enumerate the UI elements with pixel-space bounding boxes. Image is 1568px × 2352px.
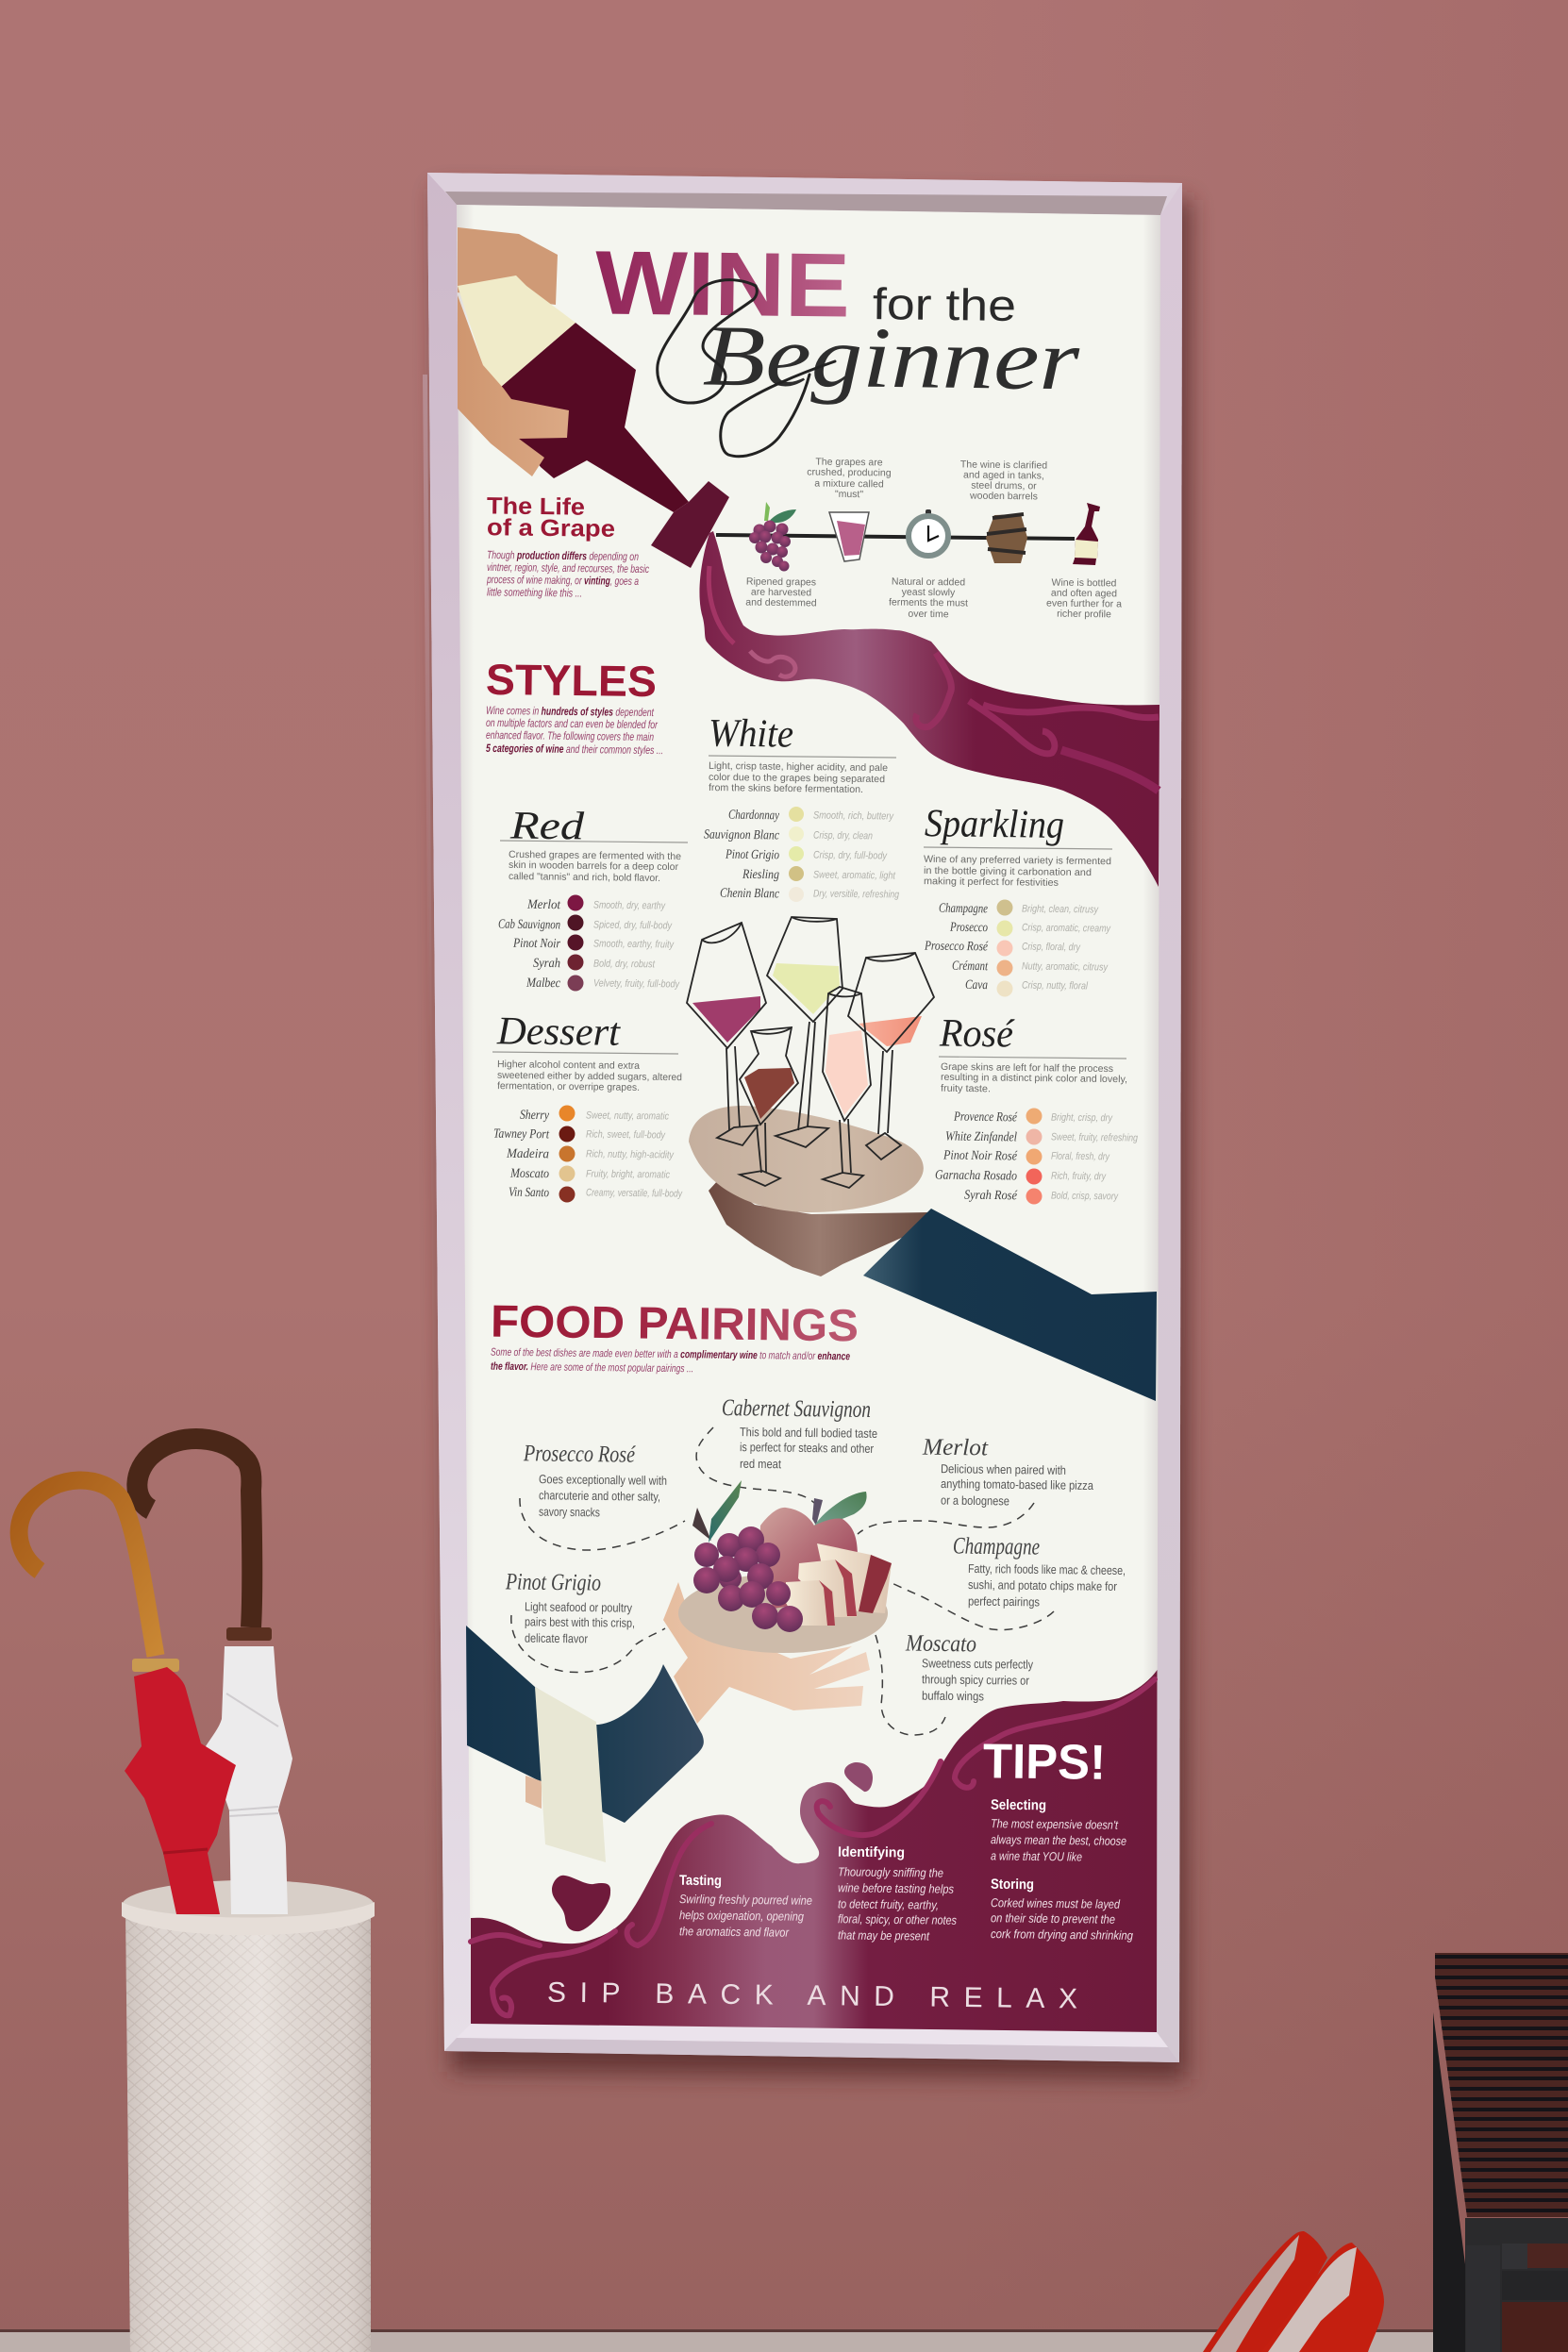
tray <box>689 1106 924 1212</box>
panel: white wine: Sweet, aromatic, light <box>813 869 896 882</box>
tip: tasting <box>679 1873 812 1940</box>
step: bottle: even further for a <box>1046 598 1122 609</box>
panel: dessert wine: sweetened either by added sugars, altered <box>497 1070 682 1083</box>
panel: rose wine: Floral, fresh, dry <box>1051 1151 1110 1162</box>
dark hand <box>709 1179 929 1276</box>
panel: red wine: Smooth, dry, earthy <box>593 900 666 911</box>
intro heading: of a Grape <box>487 514 615 542</box>
icon: grapes <box>749 502 796 572</box>
panel: rose wine: Garnacha Rosado <box>935 1168 1017 1184</box>
arm sleeve <box>458 227 558 305</box>
wrist <box>525 1776 542 1809</box>
tip: tasting: helps oxigenation, opening <box>679 1908 805 1924</box>
panel: sparkling wine: Champagne <box>939 902 988 916</box>
step: ferment <box>889 576 968 620</box>
icon: glass of must <box>829 512 869 561</box>
bottle neck foil <box>651 481 729 568</box>
pairing: cabernet sauvignon: is perfect for steaks and other <box>740 1440 875 1456</box>
panel: dessert wine: fermentation, or overripe grapes. <box>497 1080 640 1093</box>
step: bottle <box>1046 577 1122 620</box>
umbrella stand <box>122 1902 375 2352</box>
panel: red wine <box>498 805 688 991</box>
panel: red wine: called "tannis" and rich, bold flavor. <box>509 871 660 884</box>
panel: red wine: Velvety, fruity, full-body <box>593 977 680 991</box>
intro text: Though production differs depending on <box>487 548 639 563</box>
step: ferment: yeast slowly <box>902 587 956 598</box>
tip: storing: Storing <box>991 1877 1034 1893</box>
cuff <box>458 275 575 387</box>
pairing: cabernet sauvignon: This bold and full bodied taste <box>740 1425 877 1441</box>
step: must: crushed, producing <box>807 466 892 479</box>
step: bottle: and often aged <box>1051 588 1117 599</box>
pairing: moscato <box>905 1631 1033 1703</box>
step: bottle: richer profile <box>1057 609 1111 620</box>
panel: dessert wine: Sherry <box>520 1109 550 1123</box>
styles heading <box>486 655 663 757</box>
panel: red wine: Syrah <box>533 957 560 971</box>
glass: sparkling flute <box>823 987 871 1188</box>
pairing: moscato: Sweetness cuts perfectly <box>922 1656 1033 1672</box>
step: harvest: are harvested <box>751 587 811 598</box>
panel: dessert wine: Tawney Port <box>493 1127 550 1142</box>
tip: identifying: floral, spicy, or other notes <box>838 1911 957 1927</box>
panel: red wine: Malbec <box>525 976 561 991</box>
title word: WINE: WINE <box>594 232 851 337</box>
panel: sparkling wine: in the bottle giving it carbonation and <box>924 865 1092 878</box>
step: harvest: and destemmed <box>745 597 817 609</box>
panel: sparkling wine <box>924 802 1112 996</box>
step: clarified: wooden barrels <box>969 491 1038 502</box>
title word: Beginner: Beginner <box>702 308 1081 408</box>
panel: sparkling wine: making it perfect for festivities <box>924 876 1059 889</box>
red shoes <box>1203 2231 1384 2352</box>
panel: red wine: Bold, dry, robust <box>593 959 656 970</box>
pairing: moscato: Moscato <box>905 1631 976 1657</box>
pairing: cabernet sauvignon: red meat <box>740 1457 781 1471</box>
panel: sparkling wine: Cava <box>965 978 988 993</box>
panel: dessert wine: Creamy, versatile, full-body <box>586 1187 683 1200</box>
the life of a grape intro <box>486 492 649 600</box>
panel: sparkling wine: Prosecco <box>949 921 988 935</box>
hand <box>458 295 569 476</box>
tip: tasting: Swirling freshly pourred wine <box>679 1892 812 1908</box>
panel: white wine: Chenin Blanc <box>720 887 780 901</box>
panel: dessert wine: Madeira <box>506 1147 549 1161</box>
styles intro text: Wine comes in hundreds of styles dependent <box>486 704 655 719</box>
panel: white wine: Riesling <box>742 868 779 882</box>
icon: wine bottle <box>1073 503 1100 565</box>
tip: tasting: Tasting <box>679 1873 722 1889</box>
poster frame <box>427 173 1182 2062</box>
panel: rose wine: Rich, fruity, dry <box>1051 1171 1107 1182</box>
panel: white wine: Light, crisp taste, higher acidity, and pale <box>709 760 888 774</box>
glass: salmon rose <box>848 953 934 1159</box>
title flourish <box>658 280 835 457</box>
pairing: champagne: perfect pairings <box>968 1594 1041 1609</box>
panel: dessert wine: Rich, sweet, full-body <box>586 1128 666 1142</box>
hand <box>663 1582 870 1724</box>
panel: white wine: Smooth, rich, buttery <box>813 809 894 823</box>
intro heading <box>487 492 615 542</box>
intro text: process of wine making, or vinting, goes a <box>486 573 639 588</box>
panel: rose wine: Syrah Rosé <box>964 1189 1018 1203</box>
panel: dessert wine: Higher alcohol content and extra <box>497 1059 640 1072</box>
panel: red wine: Spiced, dry, full-body <box>593 919 673 932</box>
tips heading: TIPS! <box>983 1734 1106 1791</box>
tip: selecting: always mean the best, choose <box>991 1832 1126 1848</box>
panel: dessert wine: Dessert <box>496 1009 622 1055</box>
panel: white wine: color due to the grapes being separated <box>709 772 885 785</box>
intro text <box>486 548 649 600</box>
dashed connector lines <box>511 1427 1054 1735</box>
pairing: moscato: buffalo wings <box>922 1689 985 1703</box>
food pairings intro: the flavor. Here are some of the most popular pairings ... <box>491 1361 693 1375</box>
wine stream <box>699 531 1159 887</box>
step: clarified: and aged in tanks, <box>963 469 1044 482</box>
panel: rose wine <box>935 1012 1139 1204</box>
tip: identifying: Thourougly sniffing the <box>838 1864 943 1880</box>
step: must: "must" <box>835 489 863 500</box>
wine bottle <box>501 323 689 512</box>
pairing: pinot grigio: delicate flavor <box>525 1631 589 1645</box>
white umbrella <box>137 1439 292 1914</box>
panel: white wine: Crisp, dry, clean <box>813 830 873 842</box>
tip: storing: on their side to prevent the <box>991 1910 1115 1927</box>
navy sleeve <box>863 1209 1157 1401</box>
panel: sparkling wine: Prosecco Rosé <box>924 940 989 954</box>
tip: storing <box>991 1877 1134 1943</box>
pairing: pinot grigio: Pinot Grigio <box>505 1569 601 1596</box>
step: ferment: ferments the must <box>889 596 968 609</box>
panel: rose wine: Sweet, fruity, refreshing <box>1051 1131 1139 1144</box>
title <box>594 232 1081 457</box>
apple <box>760 1492 867 1609</box>
pairing: moscato: through spicy curries or <box>922 1672 1030 1688</box>
pairing: merlot: Merlot <box>922 1435 989 1460</box>
panel: dessert wine: Vin Santo <box>509 1186 549 1200</box>
panel: dessert wine: Sweet, nutty, aromatic <box>586 1109 669 1123</box>
pairing: cabernet sauvignon: Cabernet Sauvignon <box>722 1395 871 1423</box>
timeline <box>716 457 1122 620</box>
tip: selecting: The most expensive doesn't <box>991 1816 1119 1832</box>
icon: barrel <box>986 514 1027 563</box>
tip: selecting: Selecting <box>991 1797 1046 1813</box>
panel: sparkling wine: Crisp, nutty, floral <box>1022 980 1089 992</box>
panel: rose wine: Provence Rosé <box>953 1110 1018 1125</box>
step: clarified: The wine is clarified <box>960 459 1047 472</box>
styles intro text: on multiple factors and can even be blended for <box>486 716 659 731</box>
umbrella stand back rim <box>122 1880 375 1931</box>
styles intro text: 5 categories of wine and their common styles ... <box>486 742 663 757</box>
wine drop <box>552 1876 610 1931</box>
pairing: cabernet sauvignon <box>722 1395 877 1471</box>
small wine drop <box>844 1762 873 1792</box>
floor <box>0 2329 1568 2352</box>
panel: rose wine: fruity taste. <box>941 1083 991 1094</box>
step: bottle: Wine is bottled <box>1051 577 1117 589</box>
panel: rose wine: Pinot Noir Rosé <box>942 1149 1018 1163</box>
panel: sparkling wine: Sparkling <box>925 802 1064 847</box>
plate <box>678 1574 888 1653</box>
panel: white wine: from the skins before fermentation. <box>709 782 863 795</box>
pairing: prosecco rose: charcuterie and other salty, <box>539 1488 660 1504</box>
panel: red wine: Pinot Noir <box>512 937 561 951</box>
tip: identifying: Identifying <box>838 1844 905 1860</box>
panel: tips wave <box>471 1670 1157 2032</box>
panel: red wine: Crushed grapes are fermented with the <box>509 849 681 862</box>
panel: white wine: Dry, versitile, refreshing <box>813 888 900 901</box>
food pairings heading: FOOD PAIRINGS <box>491 1297 859 1351</box>
panel: red wine: Smooth, earthy, fruity <box>593 938 675 951</box>
panel: rose wine: Bold, crisp, savory <box>1051 1191 1119 1202</box>
panel: red wine: Red <box>509 805 585 848</box>
pairing: prosecco rose <box>523 1441 667 1519</box>
step: clarified <box>960 459 1047 502</box>
panel: white wine: Pinot Grigio <box>725 848 779 862</box>
panel: sparkling wine: Bright, clean, citrusy <box>1022 903 1099 916</box>
step: harvest <box>745 576 817 609</box>
illustration: waiter arm holding tray of glasses <box>687 917 1157 1401</box>
poster header: hand pouring bottle <box>458 227 729 568</box>
shirt cuff <box>535 1687 606 1862</box>
panel: dessert wine: Moscato <box>509 1167 549 1181</box>
pairing: merlot: anything tomato-based like pizza <box>941 1476 1094 1493</box>
pairing: prosecco rose: savory snacks <box>539 1505 600 1519</box>
glass: dessert <box>740 1027 798 1186</box>
panel: white wine: White <box>709 711 793 757</box>
panel: white wine: Sauvignon Blanc <box>704 828 780 842</box>
intro text: vintner, region, style, and recourses, the basic <box>487 560 649 575</box>
frame shadow <box>436 189 1191 2079</box>
red umbrella <box>19 1480 236 1914</box>
panel: rose wine: Rosé <box>939 1012 1016 1056</box>
faint frame side edge <box>423 375 432 1038</box>
grape cluster <box>693 1526 803 1632</box>
panel: dessert wine: Fruity, bright, aromatic <box>586 1168 670 1181</box>
panel: sparkling wine: Crisp, floral, dry <box>1022 942 1081 953</box>
tip: identifying: wine before tasting helps <box>838 1880 955 1896</box>
pairing: pinot grigio: Light seafood or poultry <box>525 1599 632 1615</box>
step: harvest: Ripened grapes <box>746 576 816 588</box>
pairing: prosecco rose: Prosecco Rosé <box>523 1441 636 1468</box>
pairing: champagne: Fatty, rich foods like mac & cheese, <box>968 1561 1126 1577</box>
panel: dessert wine: Rich, nutty, high-acidity <box>586 1148 675 1161</box>
tip: selecting: a wine that YOU like <box>991 1848 1082 1864</box>
food pairings heading <box>491 1297 859 1375</box>
tip: tasting: the aromatics and flavor <box>679 1924 790 1940</box>
footer slogan: SIP BACK AND RELAX <box>547 1977 1077 2014</box>
illustration: hand holding food plate <box>466 1480 892 1862</box>
glass: white wine <box>767 917 842 1147</box>
title words: for the: for the <box>873 278 1016 330</box>
styles intro text <box>486 704 663 757</box>
tip: identifying <box>838 1844 957 1943</box>
panel: white wine: Crisp, dry, full-body <box>813 850 888 861</box>
intro heading: The Life <box>487 492 585 521</box>
pairing: pinot grigio: pairs best with this crisp, <box>525 1614 635 1630</box>
styles intro text: enhanced flavor. The following covers the main <box>486 728 654 743</box>
panel: rose wine: resulting in a distinct pink color and lovely, <box>941 1072 1127 1085</box>
panel: sparkling wine: Nutty, aromatic, citrusy <box>1022 960 1109 974</box>
intro text: little something like this ... <box>487 585 582 600</box>
panel: white wine: Chardonnay <box>728 809 780 823</box>
panel: rose wine: Bright, crisp, dry <box>1051 1112 1113 1124</box>
tip: storing: Corked wines must be layed <box>991 1895 1121 1911</box>
panel: sparkling wine: Wine of any preferred variety is fermented <box>924 854 1111 867</box>
panel: rose wine: Grape skins are left for half the process <box>941 1061 1113 1075</box>
step: must <box>807 457 892 500</box>
tip: storing: cork from drying and shrinking <box>991 1927 1134 1943</box>
step: ferment: over time <box>908 609 949 620</box>
icon: stopwatch <box>909 509 948 556</box>
pairing: prosecco rose: Goes exceptionally well with <box>539 1472 667 1488</box>
panel: dessert wine <box>492 1009 683 1202</box>
pairing: merlot <box>922 1435 1094 1508</box>
pairing: merlot: or a bolognese <box>941 1493 1009 1508</box>
pairing: merlot: Delicious when paired with <box>941 1461 1066 1477</box>
panel: red wine: Cab Sauvignon <box>498 918 560 932</box>
pairing: champagne <box>953 1533 1126 1609</box>
panel: white wine <box>704 711 900 902</box>
bench <box>1433 1953 1568 2352</box>
panel: rose wine: White Zinfandel <box>945 1130 1017 1144</box>
tip: identifying: that may be present <box>838 1927 930 1943</box>
step: must: The grapes are <box>815 457 883 468</box>
step: clarified: steel drums, or <box>971 480 1037 492</box>
pairing: pinot grigio <box>505 1569 635 1645</box>
glass: red wine <box>687 923 766 1145</box>
grape leaf and stem <box>692 1480 742 1543</box>
panel: red wine: skin in wooden barrels for a deep color <box>509 859 679 873</box>
panel: sparkling wine: Crémant <box>952 959 989 974</box>
styles heading: STYLES <box>486 655 657 706</box>
food pairings intro <box>491 1347 850 1375</box>
panel: red wine: Merlot <box>526 898 561 912</box>
panel: sparkling wine: Crisp, aromatic, creamy <box>1022 922 1111 935</box>
cheese wedges <box>785 1543 892 1626</box>
step: must: a mixture called <box>814 478 884 490</box>
pairing: champagne: Champagne <box>953 1533 1040 1560</box>
food pairings intro: Some of the best dishes are made even better with a complimentary wine to match and/or enhance <box>491 1347 850 1362</box>
pairing: champagne: sushi, and potato chips make for <box>968 1577 1118 1593</box>
tip: selecting <box>991 1797 1126 1864</box>
navy sleeve <box>466 1626 704 1823</box>
poster paper <box>457 205 1160 2032</box>
step: ferment: Natural or added <box>892 576 965 588</box>
tip: identifying: to detect fruity, earthy, <box>838 1896 939 1912</box>
